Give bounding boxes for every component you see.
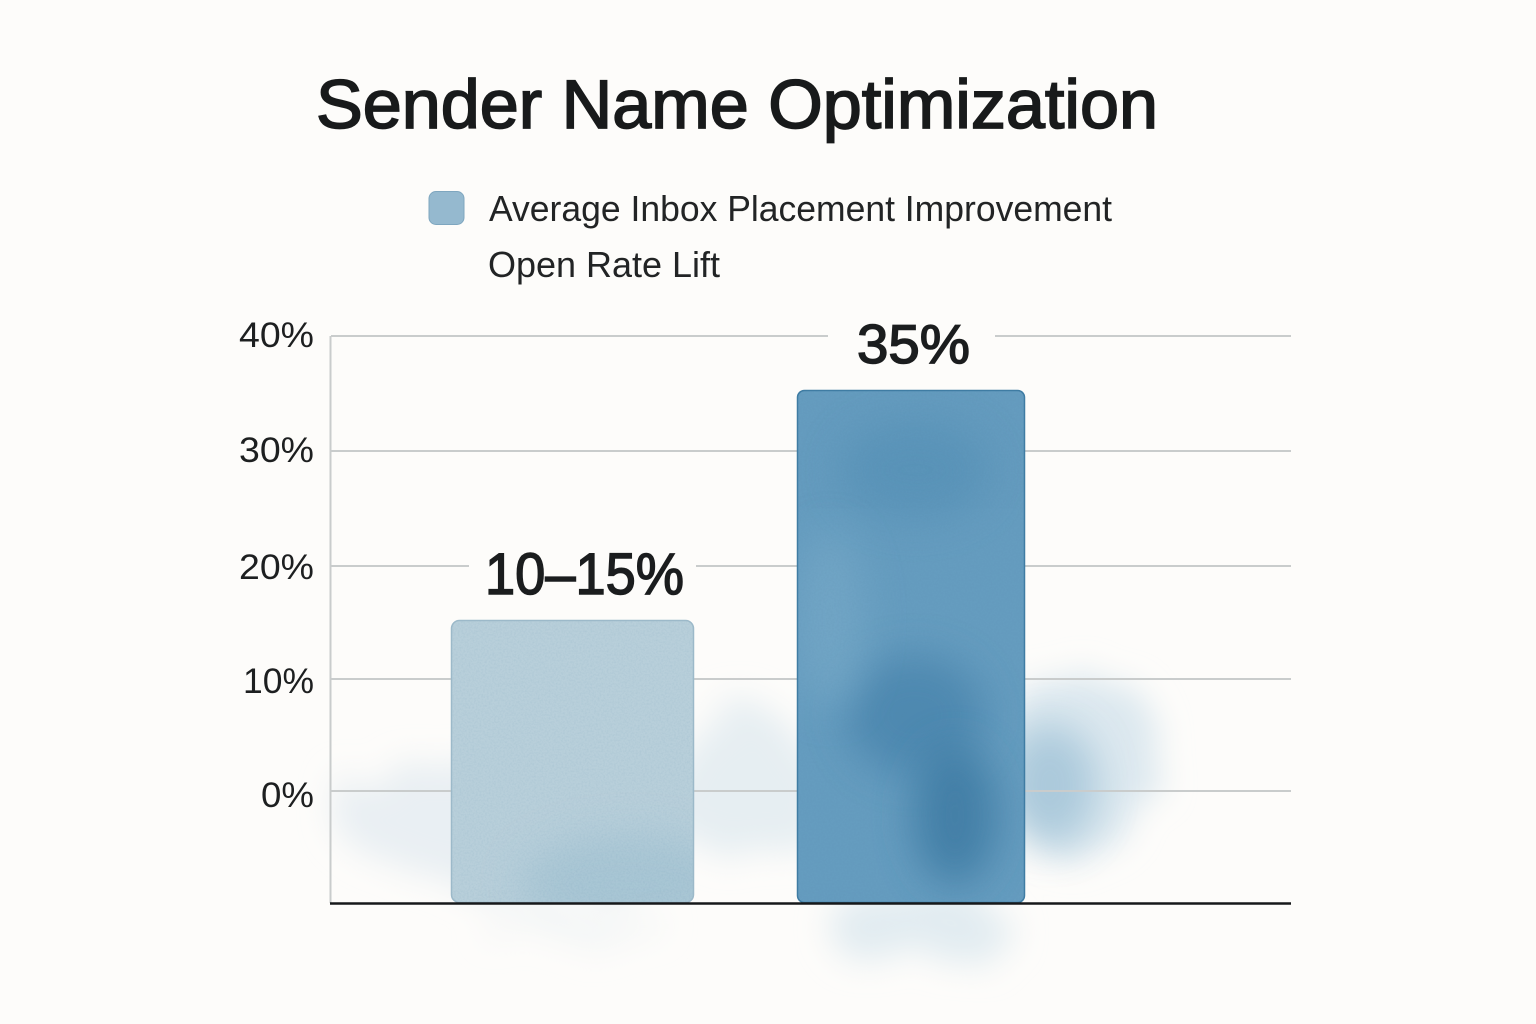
bar: inbox placement 10-15% <box>450 620 694 902</box>
bar chart <box>239 313 1291 935</box>
y axis labels: 10% <box>243 662 314 701</box>
legend label: open rate: Open Rate Lift <box>488 244 720 285</box>
y axis labels: 20% <box>239 548 314 587</box>
value label: 35%: 35% <box>857 313 970 375</box>
title: Sender Name Optimization <box>316 66 1158 143</box>
legend label: inbox placement: Average Inbox Placement Improvement <box>489 188 1112 229</box>
value label: 10-15%: 10–15% <box>485 542 684 607</box>
watercolor darker core right <box>1002 723 1098 847</box>
bar: open rate lift 35% <box>795 390 1025 903</box>
y axis labels: 0% <box>261 776 314 815</box>
legend swatch <box>429 192 464 224</box>
legend <box>429 188 1112 285</box>
y axis labels <box>239 316 314 815</box>
y axis labels: 40% <box>239 316 314 355</box>
watercolor wash behind chart <box>335 665 1160 957</box>
baseline <box>330 902 1291 905</box>
gridlines <box>330 336 1291 903</box>
y axis labels: 30% <box>239 431 314 470</box>
